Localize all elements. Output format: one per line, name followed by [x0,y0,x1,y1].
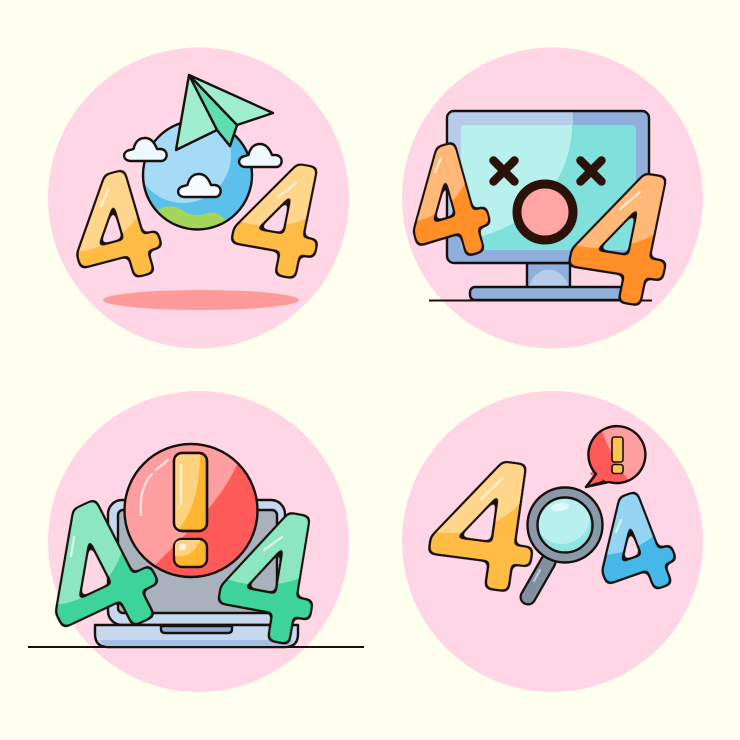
digit: right orange 4: 4 [556,131,691,342]
face: left x eye [494,160,514,182]
pink circle background [402,48,703,348]
digit: right green 4: 4 [208,468,333,681]
digit: blue 4: 4 [571,463,693,626]
digit: right green 4 [218,512,314,644]
laptop lid [108,500,285,625]
digit: left green 4: 4 [0,458,189,684]
digit: right orange 4 [568,172,666,306]
digit: right orange 4: 4 [556,131,691,342]
digit: blue 4 [601,492,676,590]
digit: right yellow 4: 4 [221,127,338,310]
digit: yellow 4: 4 [420,420,550,628]
pink circle background [402,391,703,692]
digit: right green 4: 4 [208,468,333,681]
icon: centre cloud [178,174,221,197]
panel: broken monitor face [402,48,703,348]
exclamation dot [174,539,207,567]
speech bubble alert [586,425,650,487]
icon: left cloud [124,138,167,161]
pink circle background [48,391,349,692]
digit: left orange 4 [412,142,491,256]
digit: blue 4: 4 [571,463,693,626]
digit: left yellow 4: 4 [50,140,177,317]
monitor stand [527,263,570,288]
digit: left yellow 4: 4 [50,140,177,317]
monitor base [470,287,635,300]
icon: paper plane [176,75,273,150]
digit: yellow 4: 4 [420,420,550,628]
digit: left yellow 4: 4 [50,140,177,317]
ground line [28,646,364,648]
digit: yellow 4: 4 [420,420,550,628]
face: right x eye [580,160,602,182]
illustration sheet [28,48,703,692]
digit: yellow 4 [428,460,534,592]
panel: globe and paper plane [48,48,349,348]
panel: magnifier search [402,391,703,692]
digit: left green 4 [54,500,158,628]
panel: laptop alert [0,391,364,692]
digit: left green 4: 4 [0,458,189,684]
digit: right yellow 4 [230,163,318,279]
icon: globe [142,122,254,231]
digit: left orange 4: 4 [386,109,505,297]
laptop base [95,625,298,647]
digit: blue 4: 4 [571,463,693,626]
pink circle background [48,48,349,348]
digit: right green 4: 4 [208,468,333,681]
ground shadow [103,290,299,310]
monitor frame and screen [446,110,650,264]
icon: right cloud [239,144,282,167]
alert circle [123,442,259,578]
digit: right yellow 4: 4 [221,127,338,310]
digit: left green 4: 4 [0,458,189,684]
digit: left orange 4: 4 [386,109,505,297]
exclamation bar [174,453,207,531]
digit: right yellow 4: 4 [221,127,338,310]
icon: magnifier [528,488,602,597]
digit: left yellow 4 [76,170,162,278]
face: round mouth [517,184,573,240]
digit: left orange 4: 4 [386,109,505,297]
digit: right orange 4: 4 [556,131,691,342]
ground line [429,300,652,302]
